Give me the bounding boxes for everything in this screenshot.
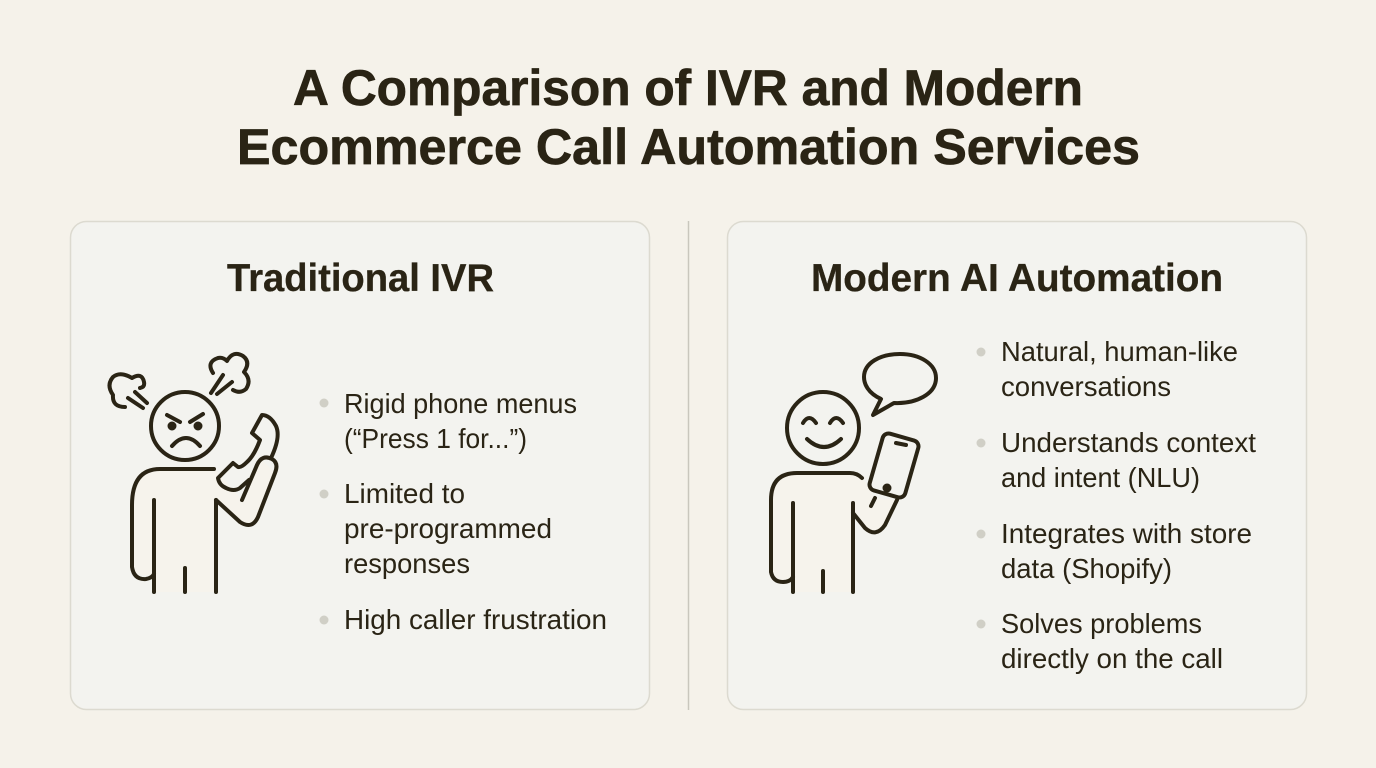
bullet list: IVR drawbacks: responses <box>344 548 470 579</box>
heading: Modern AI Automation: Modern AI Automation <box>811 257 1223 300</box>
bullet list: IVR drawbacks: Limited to <box>344 478 465 509</box>
heading: Traditional IVR: Traditional IVR <box>227 257 494 300</box>
bullet list: AI benefits: directly on the call <box>1001 643 1223 674</box>
icon: frustrated person on phone <box>110 354 278 592</box>
bullet list: IVR drawbacks: High caller frustration <box>344 604 607 635</box>
bullet list: AI benefits: conversations <box>1001 371 1171 402</box>
bullet list: AI benefits: Natural, human-like <box>1001 336 1238 367</box>
icon: happy person with smartphone <box>771 354 936 592</box>
bullet list: IVR drawbacks <box>320 388 607 635</box>
panel: Traditional IVR <box>70 222 650 710</box>
bullet list: AI benefits: and intent (NLU) <box>1001 462 1200 493</box>
title <box>237 60 1140 175</box>
panel: Modern AI Automation <box>728 222 1306 710</box>
title: A Comparison of IVR and Modern <box>293 60 1083 116</box>
bullet list: IVR drawbacks: Rigid phone menus <box>344 388 577 419</box>
bullet list: AI benefits: Integrates with store <box>1001 518 1252 549</box>
bullet list: AI benefits: data (Shopify) <box>1001 553 1172 584</box>
bullet list: AI benefits <box>976 336 1256 674</box>
bullet list: AI benefits: Solves problems <box>1001 608 1202 639</box>
bullet list: AI benefits: Understands context <box>1001 427 1256 458</box>
bullet list: IVR drawbacks: pre-programmed <box>344 513 552 544</box>
title: Ecommerce Call Automation Services <box>237 119 1140 175</box>
bullet list: IVR drawbacks: (“Press 1 for...”) <box>344 423 527 454</box>
